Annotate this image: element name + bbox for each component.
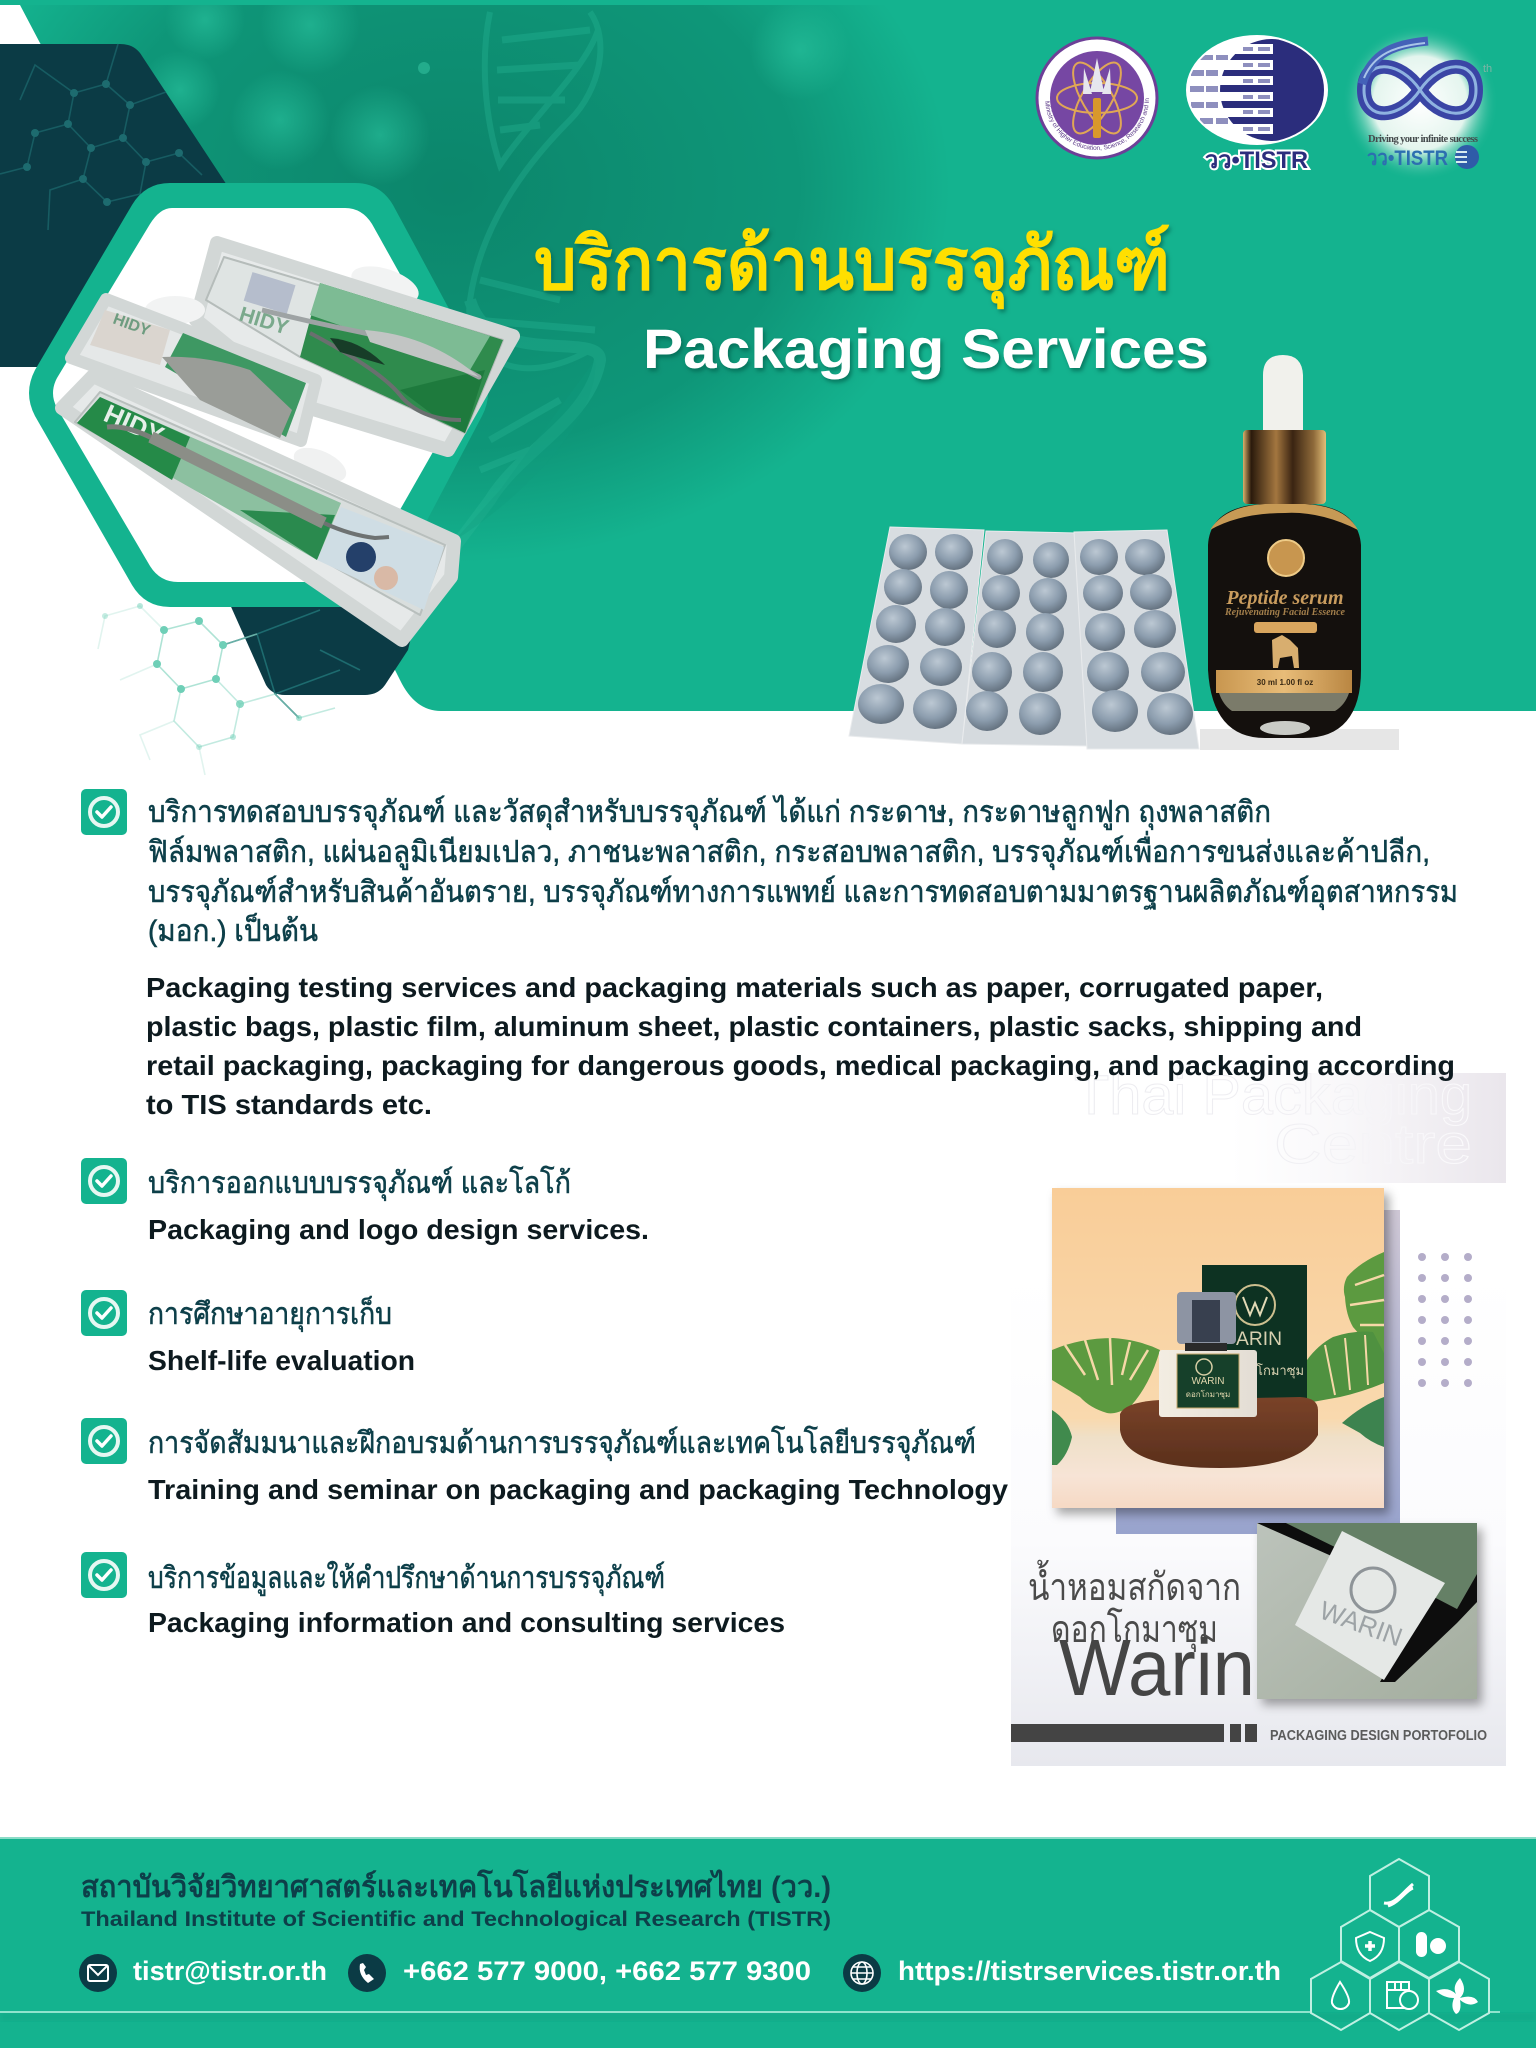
perfume bottle: ดอกโกมาซุม	[1186, 1389, 1230, 1399]
service item 2	[81, 1158, 649, 1245]
carton	[1202, 1265, 1307, 1407]
photo: peptide serum bottle: 30 ml 1.00 fl oz	[1257, 678, 1313, 687]
icon: box with star	[1387, 1982, 1418, 2009]
icon: check	[81, 789, 127, 835]
pack: middle: HIDY	[111, 311, 153, 340]
contact: website: https://tistrservices.tistr.or.th	[898, 1956, 1281, 1986]
pack: top right	[196, 243, 513, 450]
title: English: Packaging Services	[643, 317, 1209, 380]
text: Thai description: ฟิล์มพลาสติก, แผ่นอลูมิเนียมเปลว, ภาชนะพลาสติก, กระสอบพลาสติก, บรรจุภัณฑ์เพื่อการขนส่งและค้าปลีก,	[148, 831, 1430, 871]
dark hexagon: bottom	[223, 600, 420, 718]
logo: TISTR: วว•TISTR	[1205, 147, 1308, 174]
icon: shield	[1356, 1932, 1384, 1961]
bar and caption: PACKAGING DESIGN PORTOFOLIO	[1270, 1728, 1487, 1744]
icon: flower	[1436, 1978, 1478, 2014]
text: English description: retail packaging, packaging for dangerous goods, medical packaging, and packaging according	[146, 1050, 1455, 1081]
perfume bottle	[1159, 1292, 1257, 1417]
text: Thai description: บริการทดสอบบรรจุภัณฑ์ และวัสดุสำหรับบรรจุภัณฑ์ ได้แก่ กระดาษ, กระดาษลูกฟูก ถุงพลาสติก	[148, 794, 1271, 831]
footer: institute name	[81, 1868, 831, 1931]
pack: front	[62, 376, 454, 640]
text: Thai description	[148, 794, 1458, 948]
logo: 60th anniversary	[1342, 25, 1498, 181]
logo: 60th anniversary: วว•TISTR	[1367, 147, 1448, 170]
title: Thai: บริการด้านบรรจุภัณฑ์	[534, 224, 1170, 310]
carton: ดอกโกมาซุม	[1232, 1363, 1304, 1379]
pack: middle	[71, 296, 316, 441]
hexagon photo frame	[29, 183, 488, 607]
service item 3: Shelf-life evaluation	[148, 1345, 415, 1376]
white floor shadow strip	[1200, 729, 1399, 750]
text: English description	[146, 972, 1455, 1120]
icon: check	[81, 1552, 127, 1598]
text: English description: to TIS standards etc.	[146, 1089, 432, 1120]
icon: pills	[1416, 1932, 1446, 1957]
service item 2: Packaging and logo design services.	[148, 1214, 649, 1245]
carton: ARIN	[1236, 1329, 1282, 1350]
photo: peptide serum bottle	[1208, 355, 1361, 738]
logo: ministry seal	[1036, 36, 1158, 160]
service item 3: การศึกษาอายุการเก็บ	[148, 1295, 392, 1333]
hexagon pattern: light lower-left	[98, 603, 335, 775]
pack: top right: HIDY	[237, 303, 291, 339]
photo: peptide serum bottle: Peptide serum	[1225, 587, 1344, 609]
contact: phone	[348, 1954, 811, 1992]
logos row	[1036, 31, 1492, 174]
service item 4	[81, 1418, 1009, 1505]
product name: น้ำหอมสกัดจาก	[1028, 1559, 1241, 1609]
hero banner background	[0, 0, 1536, 711]
contact: phone: +662 577 9000, +662 577 9300	[403, 1956, 811, 1986]
logo: 60th anniversary: Driving your infinite success	[1368, 134, 1478, 145]
text: English description: plastic bags, plastic film, aluminum sheet, plastic containers, plastic sacks, shipping and	[146, 1011, 1362, 1042]
dot grid	[1418, 1253, 1472, 1387]
product name: Warin	[1059, 1623, 1255, 1712]
pack: front: HIDY	[100, 398, 169, 451]
service item 1	[81, 789, 1458, 1120]
panel: Warin packaging design portfolio	[1011, 1063, 1506, 1766]
icon: water drop	[1332, 1982, 1349, 2009]
service item 4: Training and seminar on packaging and packaging Technology	[148, 1474, 1009, 1505]
logo: 60th anniversary: th	[1483, 63, 1492, 75]
bar and caption	[1011, 1724, 1487, 1744]
title	[534, 224, 1209, 380]
icon: check	[81, 1418, 127, 1464]
green card mockup: WARIN	[1316, 1595, 1406, 1652]
service item 4: การจัดสัมมนาและฝึกอบรมด้านการบรรจุภัณฑ์และเทคโนโลยีบรรจุภัณฑ์	[148, 1425, 976, 1462]
hexagon icon cluster	[1311, 1859, 1489, 2030]
dark hexagon: top left	[0, 44, 240, 367]
service item 5: Packaging information and consulting services	[148, 1607, 785, 1638]
ghost heading: Thai Packaging	[1074, 1063, 1472, 1126]
ghost heading: Centre	[1274, 1112, 1472, 1175]
icon: check	[81, 1158, 127, 1204]
contact: email	[79, 1954, 327, 1992]
wood stand	[1120, 1397, 1318, 1468]
footer: institute name: Thailand Institute of Scientific and Technological Research (TISTR)	[81, 1908, 831, 1931]
leaves left	[1052, 1338, 1160, 1465]
product name: ดอกโกมาซุม	[1051, 1607, 1218, 1652]
text: English description: Packaging testing services and packaging materials such as paper, corrugated paper,	[146, 972, 1323, 1003]
service item 5	[81, 1552, 785, 1638]
logo: TISTR	[1186, 35, 1328, 174]
photo: blister pill sheets	[849, 527, 1199, 749]
lilac backing	[1116, 1210, 1400, 1534]
perfume bottle: WARIN	[1192, 1376, 1224, 1387]
green card mockup	[1257, 1523, 1477, 1699]
product photo	[1052, 1188, 1384, 1508]
leaves right	[1307, 1252, 1384, 1447]
product name	[1028, 1559, 1255, 1712]
DNA helix	[464, 10, 606, 486]
ghost heading	[1074, 1063, 1506, 1183]
service item 5: บริการข้อมูลและให้คำปรึกษาด้านการบรรจุภัณฑ์	[148, 1561, 665, 1597]
service item 3	[81, 1290, 415, 1376]
footer: institute name: สถาบันวิจัยวิทยาศาสตร์และเทคโนโลยีแห่งประเทศไทย (วว.)	[81, 1868, 831, 1904]
contact: email: tistr@tistr.or.th	[133, 1956, 327, 1986]
icon: check	[81, 1290, 127, 1336]
photo: plastic blister packs	[62, 243, 513, 640]
text: Thai description: (มอก.) เป็นต้น	[148, 912, 318, 948]
contact: website	[843, 1954, 1281, 1992]
photo: peptide serum bottle: Rejuvenating Facial Essence	[1224, 607, 1346, 618]
footer	[0, 1837, 1536, 2048]
service item 2: บริการออกแบบบรรจุภัณฑ์ และโลโก้	[148, 1165, 571, 1202]
icon: DNA	[1384, 1884, 1413, 1906]
